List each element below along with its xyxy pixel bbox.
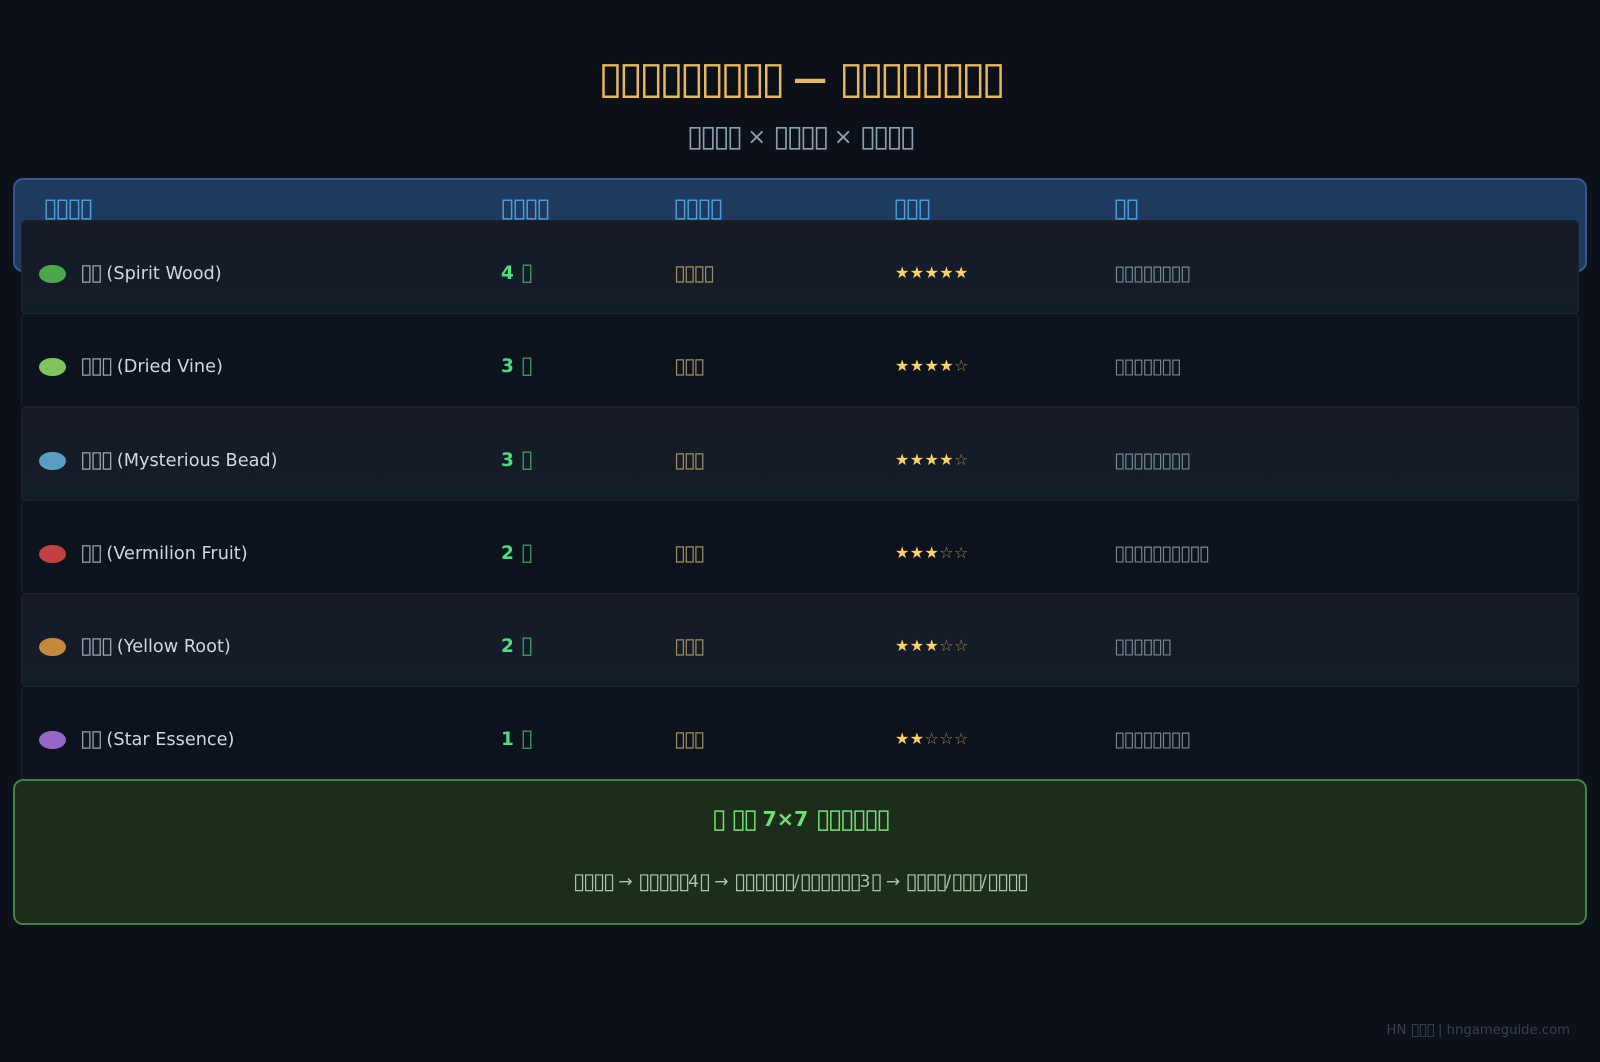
summary path text: ▯▯▯▯ → ▯▯▯▯▯4▯ → ▯▯▯▯▯▯/▯▯▯▯▯▯3▯ → ▯▯▯▯/▯▯▯/▯▯▯▯ <box>573 868 1027 894</box>
type: ▯▯▯ <box>674 354 703 379</box>
note: ▯▯▯▯▯▯▯▯▯▯ <box>1114 541 1208 565</box>
note: ▯▯▯▯▯▯ <box>1114 634 1170 658</box>
type: ▯▯▯ <box>674 448 703 473</box>
footer credit: HN ▯▯▯ | hngameguide.com <box>1387 1020 1570 1040</box>
type: ▯▯▯▯ <box>674 261 713 286</box>
icon: blue dot <box>39 452 66 470</box>
name: ▯▯ (Spirit Wood) <box>80 260 222 286</box>
stars: ★★★★★ <box>895 263 969 282</box>
summary heading: ▯ ▯▯ 7×7 ▯▯▯▯▯▯ <box>712 804 888 835</box>
icon: purple dot <box>39 730 66 749</box>
note: ▯▯▯▯▯▯▯ <box>1114 354 1180 378</box>
type: ▯▯▯ <box>674 634 703 659</box>
subtitle: ▯▯▯▯ × ▯▯▯▯ × ▯▯▯▯ <box>687 119 913 153</box>
icon: green dot <box>39 264 66 283</box>
icon: light green dot <box>39 358 66 376</box>
count: 2 ▯ <box>501 631 531 659</box>
column heading: rating: ▯▯▯ <box>893 193 929 224</box>
stars: ★★★★☆ <box>895 450 969 469</box>
stars: ★★☆☆☆ <box>895 729 969 748</box>
note: ▯▯▯▯▯▯▯▯ <box>1114 261 1189 285</box>
panel: green summary <box>13 779 1587 925</box>
count: 4 ▯ <box>501 258 531 286</box>
stars: ★★★★☆ <box>895 356 969 375</box>
count: 1 ▯ <box>501 724 531 752</box>
column heading: notes: ▯▯ <box>1113 193 1137 224</box>
row: Mysterious Bead <box>21 407 1579 501</box>
name: ▯▯▯ (Yellow Root) <box>80 633 231 659</box>
row: Spirit Wood <box>21 220 1579 314</box>
title: ▯▯▯▯▯▯▯▯▯ — ▯▯▯▯▯▯▯▯ <box>598 53 1002 104</box>
type: ▯▯▯ <box>674 727 703 752</box>
panel: table header <box>13 178 1587 272</box>
row: Dried Vine <box>21 313 1579 407</box>
stars: ★★★☆☆ <box>895 636 969 655</box>
row: Yellow Root <box>21 593 1579 687</box>
name: ▯▯▯ (Mysterious Bead) <box>80 447 278 473</box>
icon: orange dot <box>39 638 66 656</box>
stars: ★★★☆☆ <box>895 543 969 562</box>
name: ▯▯▯ (Dried Vine) <box>80 353 223 379</box>
count: 3 ▯ <box>501 445 531 473</box>
row: Star Essence <box>21 686 1579 780</box>
name: ▯▯ (Star Essence) <box>80 726 234 752</box>
column heading: count: ▯▯▯▯ <box>500 193 548 224</box>
column heading: type: ▯▯▯▯ <box>673 193 721 224</box>
note: ▯▯▯▯▯▯▯▯ <box>1114 448 1189 472</box>
count: 2 ▯ <box>501 538 531 566</box>
type: ▯▯▯ <box>674 541 703 566</box>
note: ▯▯▯▯▯▯▯▯ <box>1114 727 1189 751</box>
count: 3 ▯ <box>501 351 531 379</box>
column heading: material: ▯▯▯▯ <box>43 193 91 224</box>
icon: red dot <box>39 544 66 563</box>
name: ▯▯ (Vermilion Fruit) <box>80 540 248 566</box>
row: Vermilion Fruit <box>21 500 1579 594</box>
